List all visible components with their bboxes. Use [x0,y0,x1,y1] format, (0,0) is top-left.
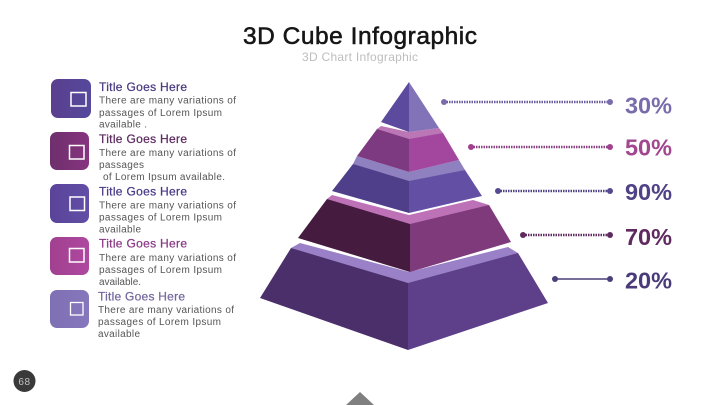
panel: list item 1 [51,79,236,130]
item 5 body [98,305,234,340]
pyramid layer 2 [357,126,459,172]
item 3 body: available [99,224,141,236]
item 1 title: Title Goes Here [99,80,187,94]
item 4 title: Title Goes Here [99,236,187,250]
chart: 3D pyramid [260,82,548,350]
pyramid layer 3 [332,156,482,213]
item 5 body: There are many variations of [98,305,234,316]
icon: tile 3 [50,184,89,223]
item 3 body: There are many variations of [99,200,236,212]
page number badge [14,370,36,392]
item 2 title: Title Goes Here [99,132,187,146]
pyramid layer 4 [298,195,511,272]
item 1 body [99,96,236,130]
value 50%: 50% [625,134,672,160]
item 3 title: Title Goes Here [99,184,187,198]
value 30%: 30% [625,92,672,118]
item 4 body: passages of Lorem Ipsum [99,265,222,276]
item 4 body: There are many variations of [99,253,236,264]
panel: list item 4 [50,236,236,288]
item 3 body [99,200,236,236]
item 5 body: available [98,329,140,340]
icon: tile 5 [50,290,89,328]
leader line 90% [495,188,613,194]
panel: list item 2 [50,132,236,183]
leader line 20% [552,276,613,282]
icon: tile 1 [51,79,91,118]
value 70%: 70% [625,224,672,250]
item 1 body: There are many variations of [99,96,236,106]
leader line 30% [441,99,613,105]
value 20%: 20% [625,268,672,294]
icon: tile 4 [50,237,89,275]
item 3 body: passages of Lorem Ipsum [99,212,222,224]
pyramid layer 5 [260,243,548,350]
title: 3D Cube Infographic [243,23,477,50]
leader line 70% [520,232,613,238]
item 2 body: There are many variations of [99,148,236,159]
item 1 body: available . [99,120,147,130]
panel: list item 5 [50,290,234,340]
item 4 body [99,253,236,288]
item 5 body: passages of Lorem Ipsum [98,317,221,328]
pyramid layer 1 [381,82,439,132]
subtitle: 3D Chart Infographic [302,50,418,64]
item 4 body: available. [99,277,141,288]
item 1 body: passages of Lorem Ipsum [99,108,222,119]
value 90%: 90% [625,179,672,205]
page number badge: 68 [18,377,31,388]
icon: tile 2 [50,132,89,170]
item 5 title: Title Goes Here [98,290,185,304]
item 2 body: passages [99,160,144,171]
leader line 50% [468,144,613,150]
item 2 body: of Lorem Ipsum available. [103,172,225,183]
item 2 body [99,148,236,183]
icon: bottom navigation triangle [346,392,374,405]
panel: list item 3 [50,184,236,236]
